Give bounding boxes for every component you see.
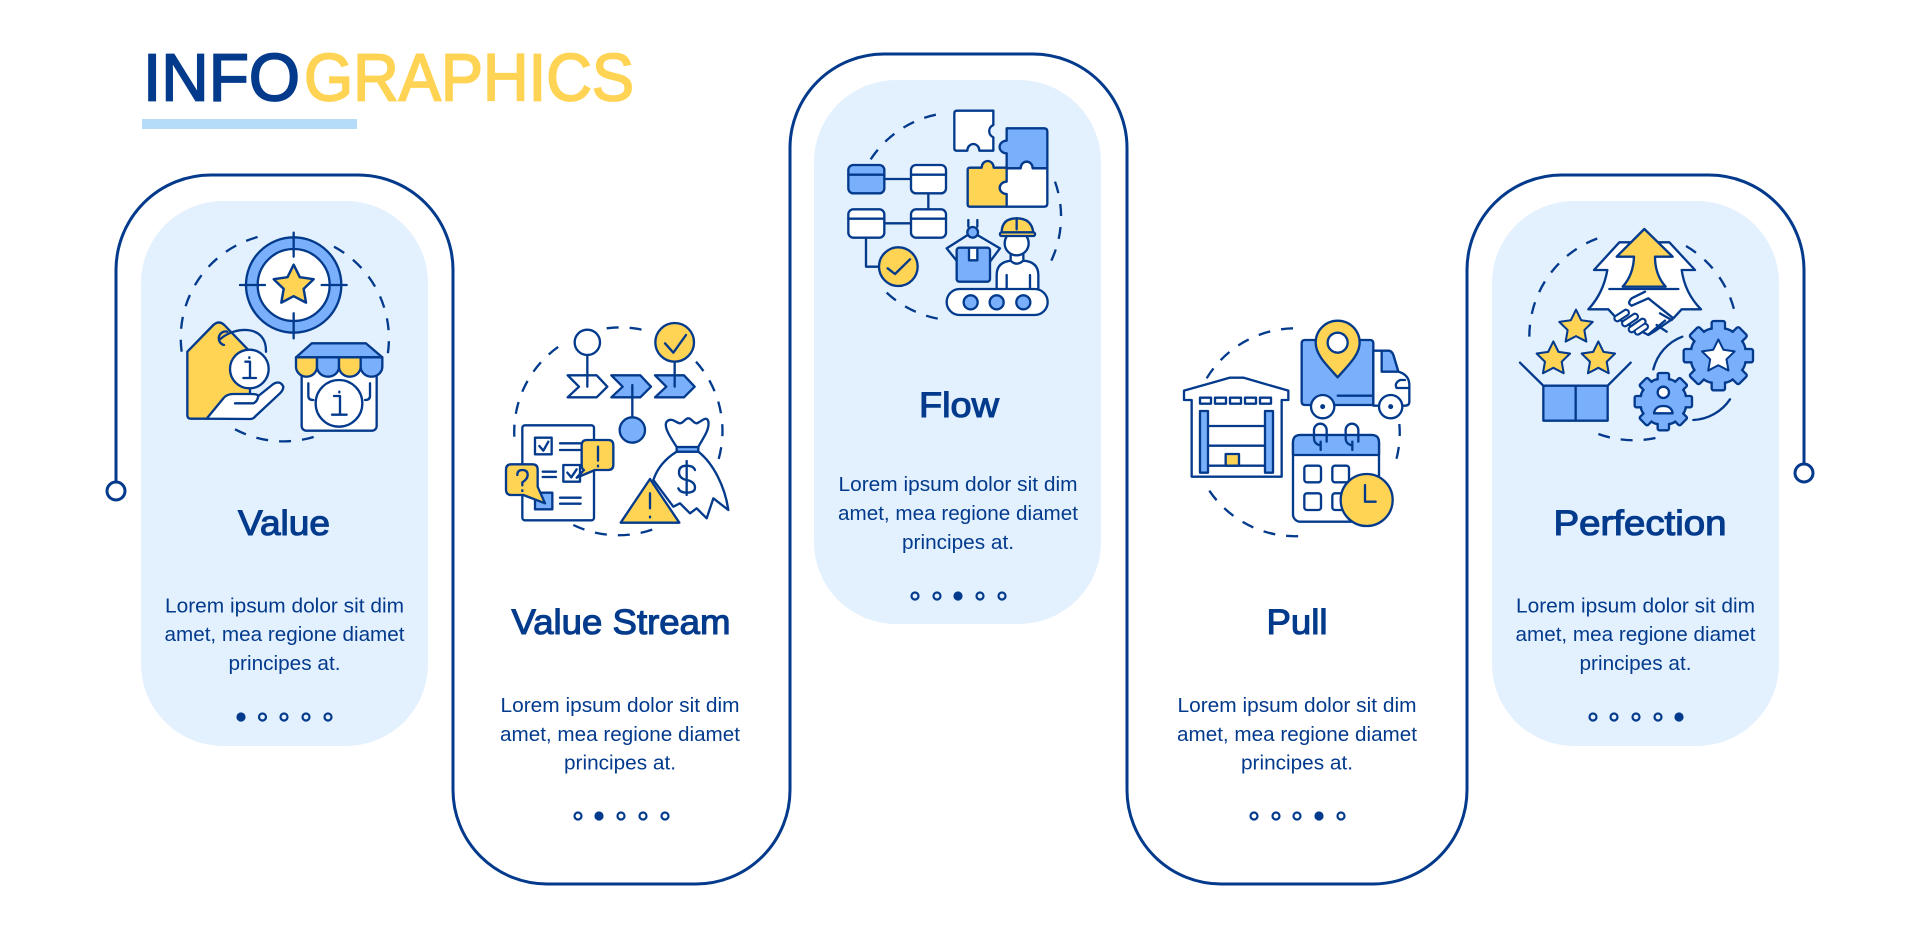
icon: process chevrons, checklist and money bag bbox=[506, 323, 728, 535]
body text: Lorem ipsum dolor sit dim bbox=[500, 695, 740, 717]
title: INFO bbox=[143, 40, 300, 116]
body text: amet, mea regione diamet bbox=[1516, 624, 1756, 646]
panel: Flow bbox=[814, 80, 1101, 624]
heading: Pull bbox=[1266, 603, 1328, 642]
heading: Value bbox=[238, 504, 330, 543]
body text bbox=[164, 596, 405, 675]
title: GRAPHICS bbox=[304, 40, 634, 116]
icon: flowchart, puzzle and worker on conveyor bbox=[848, 111, 1061, 319]
panel: Pull bbox=[1177, 321, 1417, 820]
heading: Value Stream bbox=[512, 603, 730, 642]
body text: Lorem ipsum dolor sit dim bbox=[1516, 596, 1755, 618]
heading: Flow bbox=[919, 386, 1000, 425]
icon: growth arrows, handshake, stars and gears bbox=[1520, 229, 1753, 440]
body text: principes at. bbox=[902, 532, 1014, 554]
body text: principes at. bbox=[228, 653, 340, 675]
body text: amet, mea regione diamet bbox=[500, 724, 740, 746]
title bbox=[143, 40, 634, 116]
body text: principes at. bbox=[1241, 752, 1353, 774]
body text: Lorem ipsum dolor sit dim bbox=[838, 474, 1078, 496]
pagination dots bbox=[238, 714, 332, 720]
icon: warehouse, truck and calendar bbox=[1184, 321, 1409, 536]
pagination dots bbox=[912, 592, 1006, 600]
body text: amet, mea regione diamet bbox=[1177, 724, 1417, 746]
panel: Value Stream bbox=[500, 323, 740, 820]
connector outline bbox=[107, 54, 1813, 884]
body text: principes at. bbox=[564, 752, 676, 774]
panel: Perfection bbox=[1492, 201, 1779, 746]
body text: Lorem ipsum dolor sit dim bbox=[1178, 695, 1416, 717]
heading: Perfection bbox=[1554, 504, 1726, 543]
pagination dots bbox=[574, 812, 668, 820]
icon: target, price tag and shop bbox=[181, 233, 389, 441]
body text: amet, mea regione diamet bbox=[164, 624, 405, 646]
body text: amet, mea regione diamet bbox=[838, 503, 1078, 525]
panel: Value bbox=[141, 201, 428, 746]
body text bbox=[838, 474, 1078, 554]
title underline bbox=[142, 119, 357, 129]
pagination dots bbox=[1250, 812, 1344, 820]
pagination dots bbox=[1590, 714, 1682, 720]
body text: principes at. bbox=[1580, 653, 1692, 675]
body text bbox=[500, 695, 740, 774]
body text bbox=[1516, 596, 1756, 675]
body text bbox=[1177, 695, 1417, 774]
body text: Lorem ipsum dolor sit dim bbox=[165, 596, 404, 618]
